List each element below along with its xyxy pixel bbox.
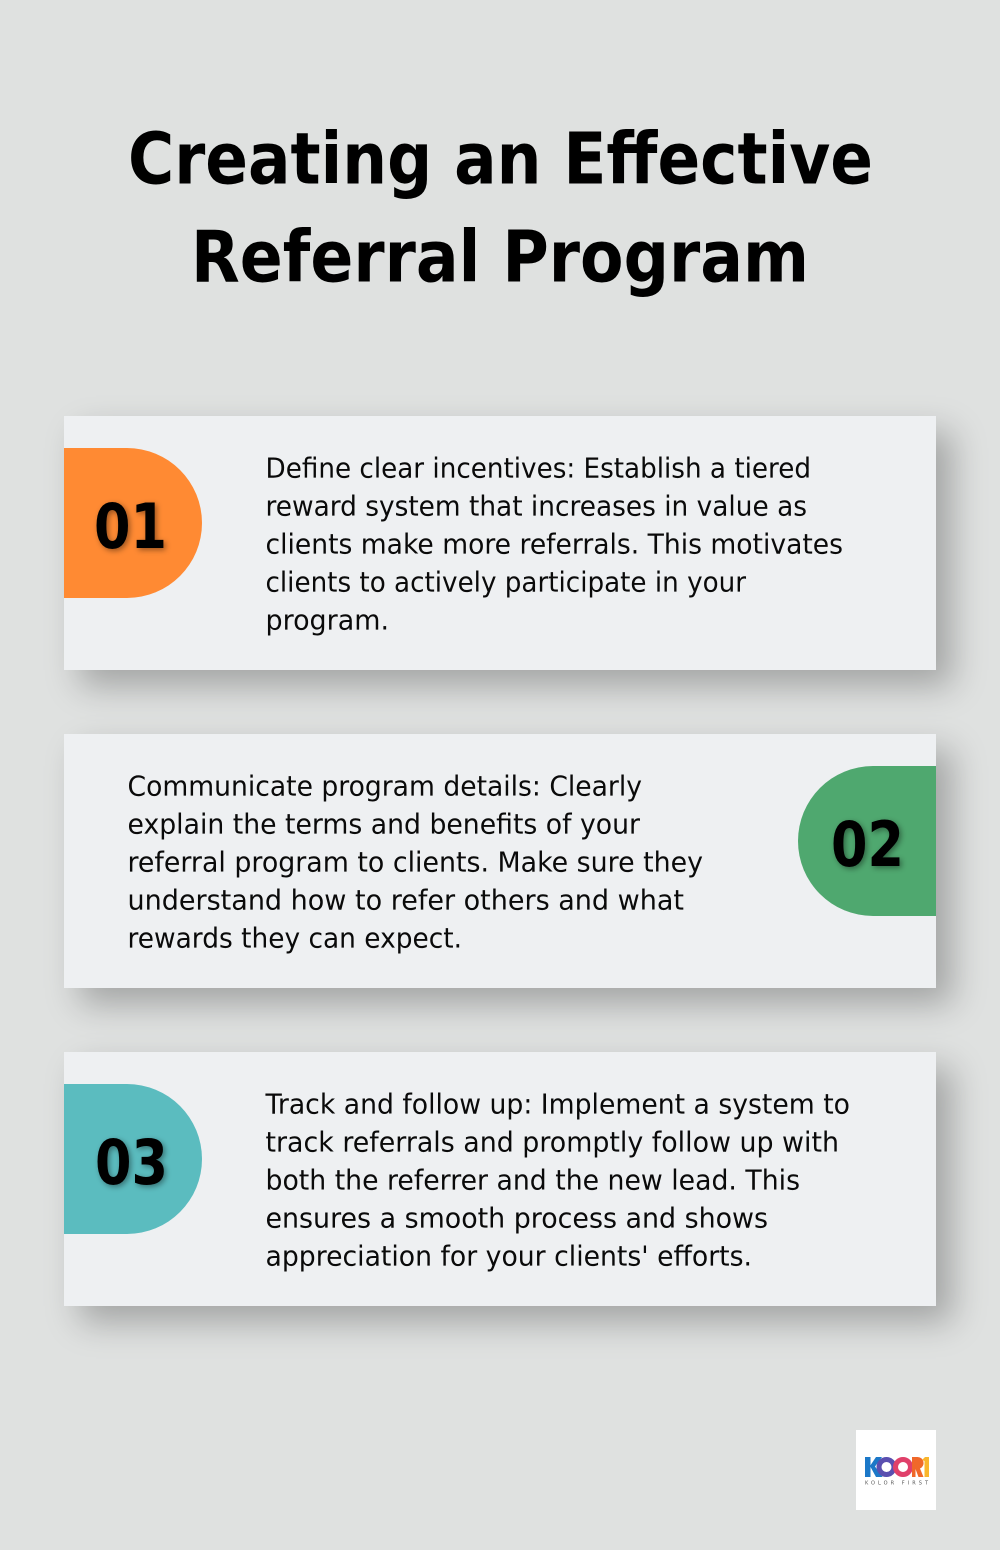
badge: 03: 03: [95, 1126, 168, 1199]
text: track and follow up: [265, 1090, 850, 1272]
panel: step 1: [64, 416, 936, 670]
badge: 02: 02: [831, 808, 904, 881]
text: define clear incentives: [266, 454, 843, 636]
logo tagline: KOLOR FIRST: [865, 1480, 929, 1486]
text: define clear incentives: Define clear incentives: Establish a tiered: [266, 454, 811, 484]
text: communicate program details: referral program to clients. Make sure they: [128, 848, 703, 878]
text: track and follow up: track referrals and promptly follow up with: [266, 1128, 839, 1158]
text: define clear incentives: clients to actively participate in your: [266, 568, 747, 598]
text: define clear incentives: program.: [266, 606, 389, 636]
panel: step 2: [64, 734, 936, 988]
text: communicate program details: rewards they can expect.: [128, 924, 462, 954]
text: communicate program details: [128, 772, 703, 954]
text: track and follow up: Track and follow up: Implement a system to: [265, 1090, 850, 1120]
panel: step 3: [64, 1052, 936, 1306]
text: communicate program details: understand how to refer others and what: [128, 886, 684, 916]
badge: 03: [64, 1084, 202, 1234]
text: track and follow up: both the referrer and the new lead. This: [266, 1166, 800, 1196]
badge: 01: 01: [94, 490, 167, 563]
text: communicate program details: Communicate program details: Clearly: [128, 772, 642, 802]
text: define clear incentives: reward system that increases in value as: [266, 492, 807, 522]
badge: 01: [64, 448, 202, 598]
text: track and follow up: ensures a smooth process and shows: [266, 1204, 768, 1234]
text: communicate program details: explain the terms and benefits of your: [128, 810, 641, 840]
logo: Koor1 Kolor First: [856, 1430, 936, 1510]
logo letters: [865, 1457, 929, 1477]
badge: 02: [798, 766, 936, 916]
text: define clear incentives: clients make more referrals. This motivates: [266, 530, 843, 560]
title: Referral Program: [191, 216, 809, 298]
title: [128, 118, 873, 298]
text: track and follow up: appreciation for your clients' efforts.: [266, 1242, 752, 1272]
